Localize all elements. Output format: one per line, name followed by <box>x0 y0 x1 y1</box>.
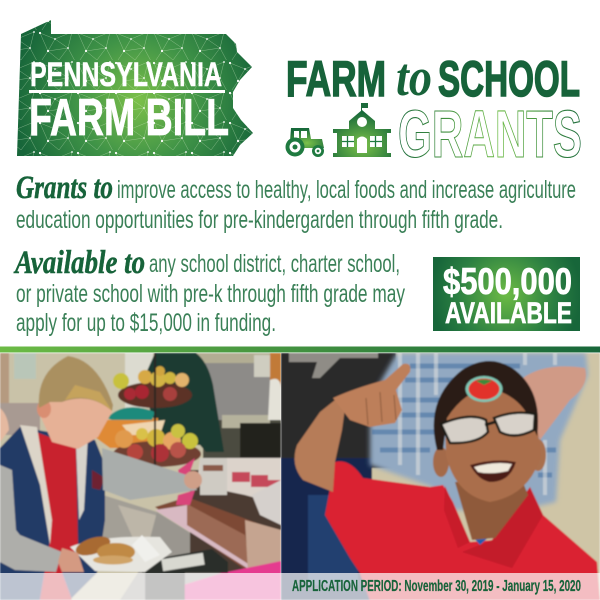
green divider bar <box>0 346 600 352</box>
text block: eligibility <box>13 245 405 337</box>
text block: eligibility: or private school with pre-k through fifth grade may <box>16 280 405 308</box>
side child <box>0 408 9 442</box>
plate and food <box>70 533 172 572</box>
upper fruit basket <box>113 353 192 471</box>
smile <box>470 461 516 482</box>
translucent footer strip <box>0 573 600 600</box>
boy shirt <box>36 432 78 600</box>
red shirt <box>325 461 600 600</box>
sticker: tomato <box>466 376 502 402</box>
card reader <box>142 549 228 573</box>
glasses <box>441 413 535 443</box>
text block: eligibility: Available to <box>13 245 145 281</box>
photo: boy in lunch line <box>0 353 281 600</box>
logo text: Pennsylvania: PENNSYLVANIA <box>30 56 222 94</box>
hair <box>434 361 538 450</box>
logo text: Farm Bill: FARM BILL <box>29 89 229 147</box>
boy hand on plate <box>58 548 84 572</box>
callout: $500,000 available: $500,000 <box>443 261 572 302</box>
plaid shirt background <box>370 353 588 510</box>
adult forearm <box>523 366 586 440</box>
logo: Pennsylvania Farm Bill <box>17 20 253 156</box>
title: Farm to School: to <box>396 47 432 107</box>
icon: tractor <box>286 128 324 157</box>
text block: eligibility: apply for up to $15,000 in funding. <box>16 309 276 337</box>
head <box>445 388 541 502</box>
raised arm <box>295 400 345 492</box>
title: Farm to School <box>286 47 580 107</box>
photo: smiling boy with thumbs up <box>281 353 600 600</box>
text block: grants purpose: Grants to <box>16 170 113 206</box>
food counter <box>102 496 158 539</box>
boy head <box>41 398 112 450</box>
pink mat <box>183 561 281 600</box>
back person <box>143 353 224 452</box>
boy jacket <box>0 427 105 600</box>
boy hair <box>39 356 113 411</box>
logo divider <box>29 90 225 93</box>
boy raised sleeve <box>102 448 197 500</box>
text block: eligibility: any school district, charter school, <box>149 250 400 278</box>
thumbs up hand <box>333 364 410 427</box>
milk cartons <box>155 458 281 573</box>
orange and teal behind fruit <box>92 418 158 448</box>
neck <box>455 480 528 540</box>
lower fruit basket <box>113 424 201 467</box>
text block: grants purpose <box>16 170 576 234</box>
callout: $500,000 available <box>433 257 580 331</box>
state map shape <box>17 20 253 156</box>
boy hand reaching <box>184 471 202 489</box>
title: Farm to School: FARM <box>286 51 386 107</box>
icon: schoolhouse <box>333 103 391 157</box>
ears <box>433 447 449 477</box>
boy grey sleeve <box>0 465 62 572</box>
